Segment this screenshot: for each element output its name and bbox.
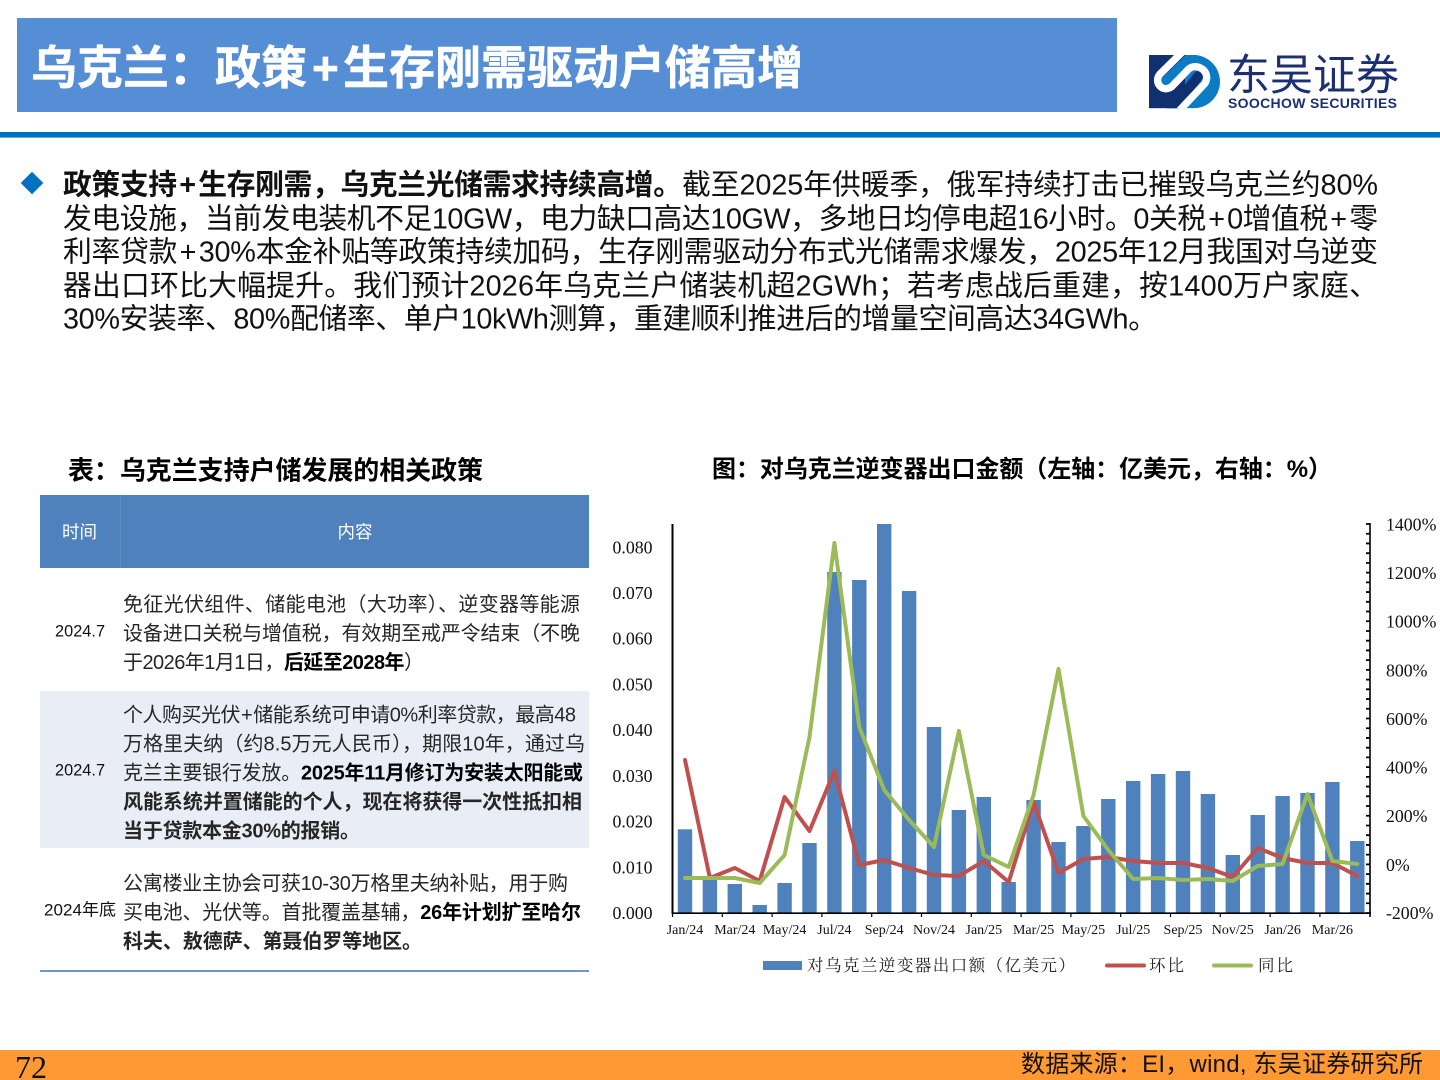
left axis labels: 0.060: [612, 629, 653, 649]
title text: +: [312, 42, 339, 94]
x axis labels: Nov/25: [1212, 923, 1254, 938]
left axis labels: 0.020: [612, 812, 653, 832]
table row 3: 科夫、敖德萨、第聂伯罗等地区。: [123, 930, 422, 953]
right axis labels: 1200%: [1386, 563, 1437, 583]
source note: 数据来源：EI，wind, 东吴证券研究所: [1021, 1051, 1423, 1078]
chart heading: 图：对乌克兰逆变器出口金额（左轴：亿美元，右轴：%）: [712, 455, 1332, 483]
right axis labels: 1000%: [1386, 612, 1437, 632]
left axis labels: 0.070: [612, 583, 653, 603]
right axis labels: -200%: [1386, 903, 1434, 923]
table row 2: 克兰主要银行发放。2025年11月修订为安装太阳能或: [123, 760, 583, 784]
logo English name: SOOCHOW SECURITIES: [1228, 95, 1397, 111]
chart legend: 环比: [1149, 956, 1184, 975]
right axis labels: 0%: [1386, 855, 1410, 875]
title text: 乌克兰：政策: [31, 42, 307, 94]
table row 2: 风能系统并置储能的个人，现在将获得一次性抵扣相: [123, 790, 582, 814]
table row 2: 个人购买光伏+储能系统可申请0%利率贷款，最高48: [123, 704, 576, 726]
header rule: [0, 132, 1440, 138]
table header row: [40, 495, 589, 568]
text block: key takeaway: 30%安装率、80%配储率、单户10kWh测算，重建顺利推进后的增量空间高达34GWh。: [63, 303, 1157, 335]
table row 1: 2024.7: [55, 622, 105, 640]
right axis labels: 200%: [1386, 806, 1428, 826]
x axis labels: Sep/24: [865, 923, 904, 938]
x axis labels: May/24: [763, 923, 806, 938]
title banner: [17, 18, 1117, 112]
table row 1: [55, 593, 580, 674]
text block: key takeaway: 利率贷款+30%本金补贴等政策持续加码，生存刚需驱动分布式光储需求爆发，2025年12月我国对乌逆变: [63, 237, 1378, 269]
icon: bullet diamond: [21, 172, 43, 194]
x axis labels: Nov/24: [913, 923, 955, 938]
left axis labels: 0.040: [612, 720, 653, 740]
x axis labels: May/25: [1062, 923, 1105, 938]
table row 2: [40, 691, 589, 848]
table header row: 时间: [62, 522, 97, 542]
table row 2: 当于贷款本金30%的报销。: [123, 818, 360, 842]
x axis labels: Jul/25: [1116, 923, 1150, 938]
x axis labels: Jul/24: [817, 923, 852, 938]
left axis labels: [612, 537, 653, 923]
right axis labels: 1400%: [1386, 514, 1437, 534]
line series: year on year: [685, 543, 1357, 883]
table row 3: 2024年底: [44, 900, 116, 920]
chart axes: [672, 523, 1371, 917]
left axis labels: 0.000: [612, 903, 653, 923]
x axis labels: Mar/24: [714, 923, 755, 938]
x axis labels: Jan/26: [1264, 923, 1301, 938]
table row 3: 买电池、光伏等。首批覆盖基辅，26年计划扩至哈尔: [123, 901, 581, 924]
text block: key takeaway: [63, 169, 1378, 335]
left axis labels: 0.050: [612, 674, 653, 694]
table row 2: 2024.7: [55, 762, 105, 780]
logo wordmark: 东吴证券: [1227, 52, 1399, 100]
title text: 生存刚需驱动户储高增: [343, 42, 803, 94]
table row 1: 于2026年1月1日，后延至2028年）: [123, 651, 424, 674]
x axis labels: Jan/25: [966, 923, 1002, 938]
table row 1: 设备进口关税与增值税，有效期至戒严令结束（不晚: [123, 622, 580, 645]
panel: policy table: [40, 495, 589, 972]
x axis labels: Jan/24: [667, 923, 703, 938]
bar series: export value: [678, 524, 1364, 913]
x axis labels: Mar/26: [1312, 923, 1353, 938]
logo: Soochow Securities: [1149, 50, 1399, 111]
text block: key takeaway: 发电设施，当前发电装机不足10GW，电力缺口高达10GW，多地日均停电超16小时。0关税+0增值税+零: [63, 203, 1378, 235]
right axis labels: 600%: [1386, 709, 1428, 729]
text block: key takeaway: 截至2025年供暖季，俄军持续打击已摧毁乌克兰约80%: [682, 169, 1378, 201]
footer bar: [0, 1049, 1440, 1080]
right axis labels: [1386, 514, 1437, 923]
x axis labels: Sep/25: [1164, 923, 1202, 938]
table row 3: [44, 872, 581, 953]
table header row: 内容: [338, 522, 372, 542]
table heading: 表：乌克兰支持户储发展的相关政策: [68, 456, 483, 486]
table row 3: 公寓楼业主协会可获10-30万格里夫纳补贴，用于购: [123, 872, 568, 895]
right axis labels: 800%: [1386, 660, 1428, 680]
left axis labels: 0.010: [612, 857, 653, 877]
x axis labels: Mar/25: [1013, 923, 1054, 938]
left axis labels: 0.030: [612, 766, 653, 786]
left axis labels: 0.080: [612, 537, 653, 557]
table row 1: 免征光伏组件、储能电池（大功率）、逆变器等能源: [123, 593, 580, 616]
x axis labels: [667, 923, 1353, 938]
table row 2: 万格里夫纳（约8.5万元人民币），期限10年，通过乌: [123, 732, 585, 756]
panel: export value chart: [612, 514, 1437, 975]
text block: key takeaway: 器出口环比大幅提升。我们预计2026年乌克兰户储装机超2GWh；若考虑战后重建，按1400万户家庭、: [63, 270, 1378, 302]
right axis labels: 400%: [1386, 758, 1428, 778]
chart legend: 同比: [1258, 956, 1293, 975]
chart legend: [763, 956, 1293, 975]
line series: month on month: [685, 760, 1357, 882]
icon: logo mark: [1149, 55, 1220, 108]
text block: key takeaway: 政策支持+生存刚需，乌克兰光储需求持续高增。: [63, 169, 682, 201]
chart legend: 对乌克兰逆变器出口额（亿美元）: [807, 956, 1075, 975]
